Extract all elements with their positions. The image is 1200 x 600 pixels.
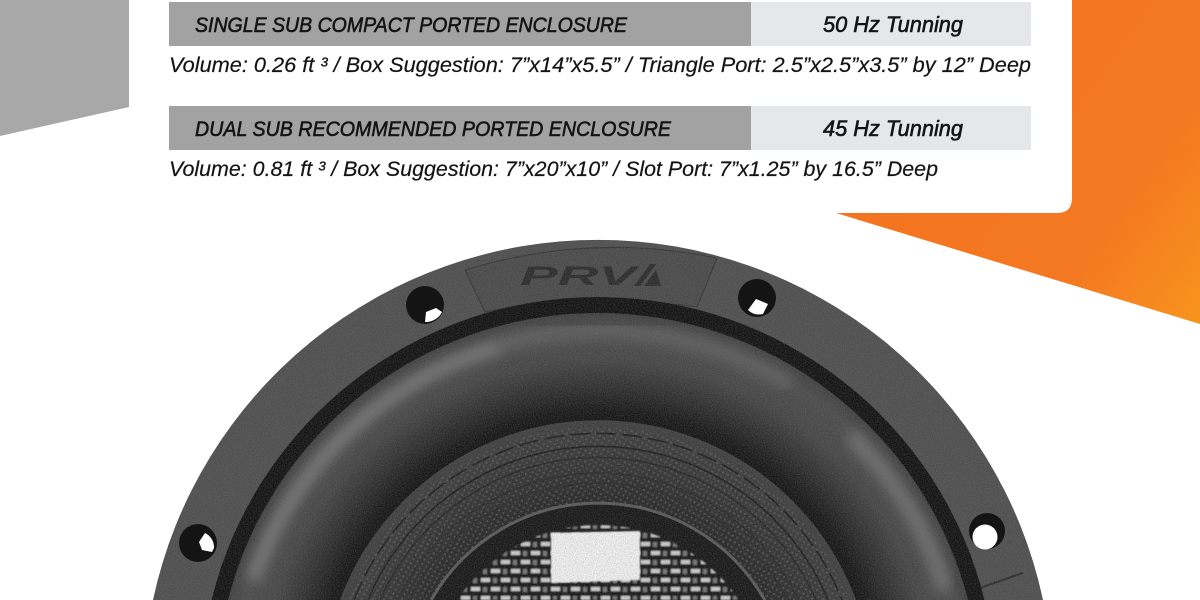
- carbon dust cap: [457, 525, 739, 600]
- mounting hole: lower right: [969, 513, 1005, 550]
- surround highlight: [253, 347, 500, 580]
- cone stitching: [354, 433, 842, 600]
- subwoofer photo illustration: [153, 240, 1043, 600]
- tuning bar: 50 Hz: [751, 2, 1031, 46]
- surround top highlight: [500, 331, 790, 385]
- specification line: single sub: Volume: 0.26 ft ³ / Box Suggestion: 7”x14”x5.5” / Triangle Port: 2.5”x2.5”x3.5” by 12” Deep: [169, 54, 1031, 77]
- rubber surround: [228, 313, 968, 600]
- heading: single sub enclosure: SINGLE SUB COMPACT PORTED ENCLOSURE: [195, 14, 628, 37]
- surround right highlight: [850, 435, 945, 590]
- logo plate: [465, 247, 717, 312]
- logo mark: [634, 264, 661, 286]
- grey corner shape: [0, 0, 129, 136]
- outer frame: [153, 240, 1043, 600]
- enclosure spec: single sub: [169, 2, 1031, 77]
- tuning label: 50 Hz: 50 Hz Tunning: [823, 12, 964, 37]
- orange corner shape: [836, 0, 1200, 324]
- PRV logo: PRV: [520, 261, 640, 291]
- header bar: single sub: [169, 2, 751, 46]
- tuning label: 45 Hz: 45 Hz Tunning: [823, 116, 964, 141]
- cone mesh texture: [347, 427, 849, 600]
- speaker surface grain: [153, 240, 1043, 600]
- enclosure spec: dual sub: [169, 106, 1031, 181]
- mounting hole: top left: [406, 286, 444, 324]
- tuning bar: 45 Hz: [751, 106, 1031, 150]
- specification line: dual sub: Volume: 0.81 ft ³ / Box Suggestion: 7”x20”x10” / Slot Port: 7”x1.25” by 16.5” Deep: [169, 158, 938, 181]
- black recess ring: [212, 297, 984, 600]
- mounting hole: top right: [738, 279, 776, 317]
- header bar: dual sub: [169, 106, 751, 150]
- mounting hole: lower left: [179, 524, 217, 562]
- lower right frame seam: [980, 573, 1023, 588]
- dust cap highlight: [551, 531, 640, 583]
- dust cap rim: [431, 503, 765, 600]
- heading: dual sub enclosure: DUAL SUB RECOMMENDED PORTED ENCLOSURE: [195, 118, 672, 141]
- cone: [340, 420, 856, 600]
